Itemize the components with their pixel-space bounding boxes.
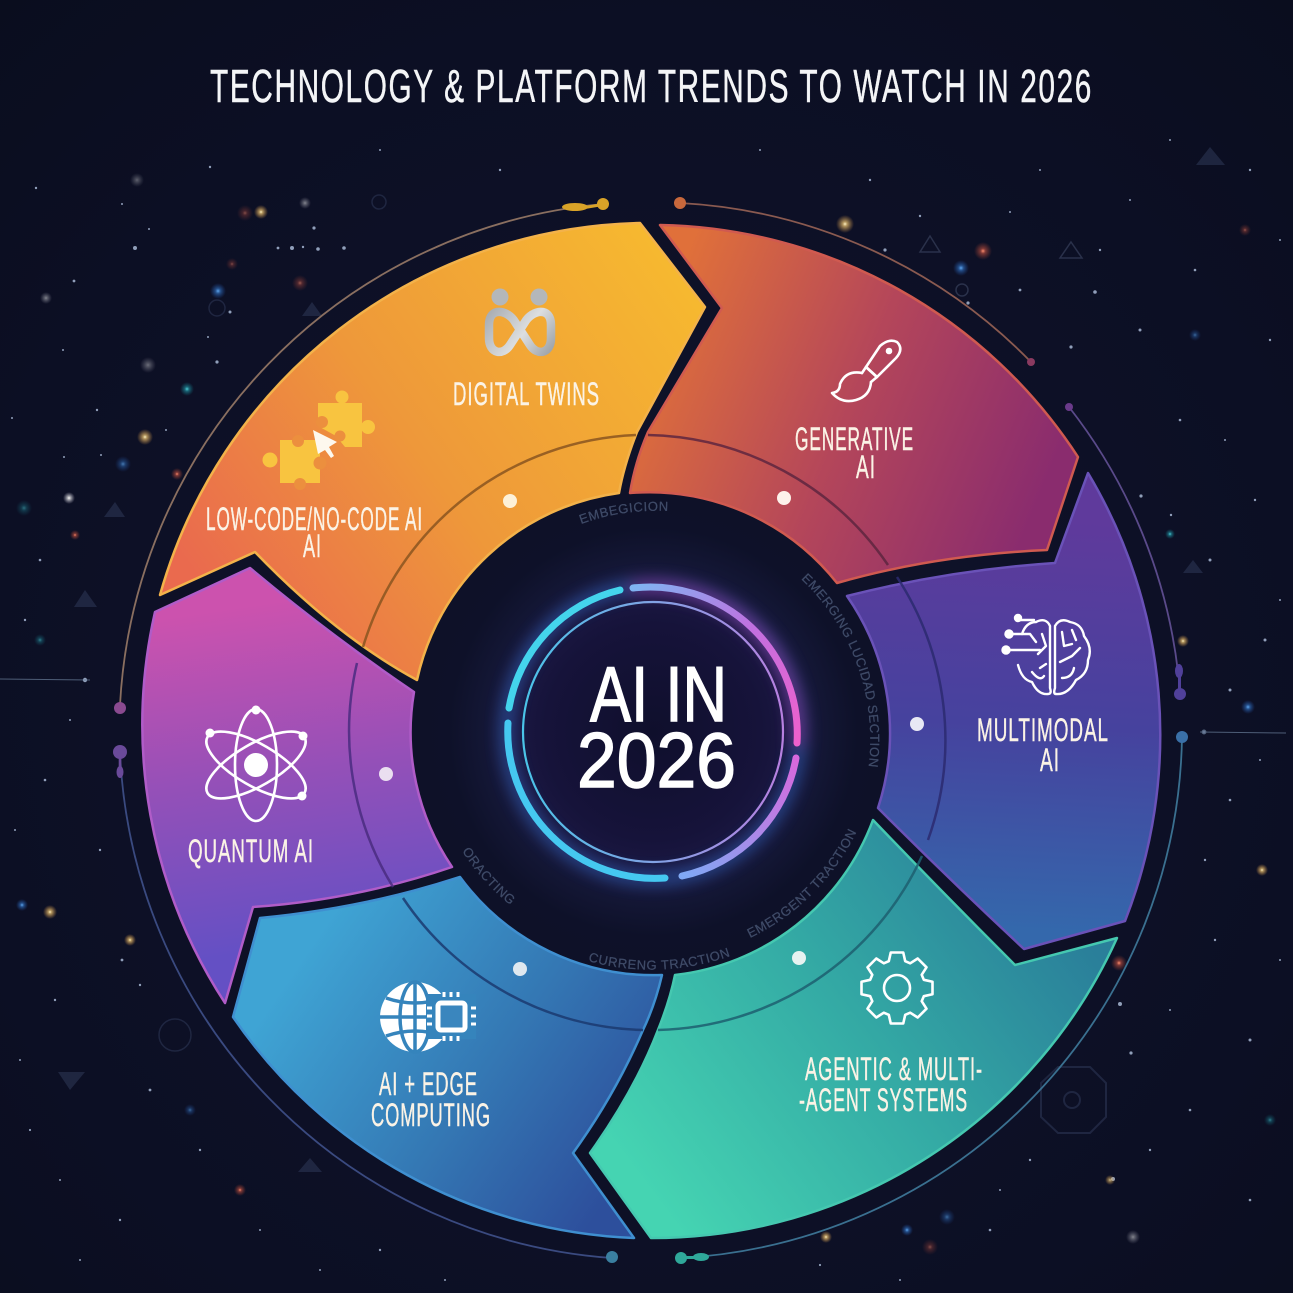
center hub disc: [405, 488, 895, 978]
dot: [503, 494, 517, 508]
label: AI + edge: AI + EDGE: [379, 1066, 478, 1102]
icon: gear: [862, 952, 932, 1024]
curved ghost labels: EMERGENT TRACTION: [746, 828, 856, 938]
label: multimodal AI line: AI: [1040, 742, 1060, 778]
curved ghost labels: CURRENG TRACTION: [590, 948, 730, 970]
label: generative: GENERATIVE: [795, 421, 914, 457]
dot: [910, 717, 924, 731]
side connector lines: [0, 679, 1286, 734]
curved ghost labels: ORACTING: [464, 848, 514, 904]
ring: violet: [349, 663, 393, 887]
center title: 2026: [577, 716, 736, 804]
icon: digital twins: [489, 288, 551, 352]
segment: generative AI: [630, 225, 1078, 583]
label: multimodal: MULTIMODAL: [977, 712, 1109, 748]
segment: agentic systems: [590, 820, 1117, 1238]
ring: red: [648, 435, 888, 565]
label: quantum AI: QUANTUM AI: [188, 833, 314, 869]
label: computing: COMPUTING: [371, 1097, 491, 1133]
label: low-code no-code: LOW-CODE/NO-CODE AI: [206, 501, 423, 537]
dot: [379, 767, 393, 781]
central glow: [506, 585, 800, 879]
icon: puzzle pieces with cursor: [262, 390, 375, 490]
dot: [792, 951, 806, 965]
label: agentic line 2: -AGENT SYSTEMS: [799, 1082, 968, 1118]
dot: [513, 962, 527, 976]
outer orbit arcs: [113, 197, 1188, 1264]
faint background shapes: [58, 147, 1225, 1172]
ring: orange: [363, 435, 636, 647]
icon: atom: [197, 706, 315, 821]
icon: paintbrush: [832, 341, 900, 401]
icon: brain: [1002, 615, 1090, 694]
segment: multimodal AI: [847, 473, 1160, 949]
segment: quantum AI: [142, 568, 452, 1003]
ring: teal: [658, 856, 922, 1030]
center title: [577, 650, 736, 804]
icon: globe with chip: [380, 982, 476, 1052]
segment: AI and edge computing: [233, 877, 662, 1238]
ring: purple: [897, 577, 945, 840]
segment: digital twins and low-code: [160, 223, 705, 680]
curved ghost labels: [464, 502, 880, 970]
label: generative AI line: AI: [856, 449, 876, 485]
label: agentic line 1: AGENTIC & MULTI-: [805, 1051, 983, 1087]
curved ghost labels: EMERGING LUCIDAD SECTION: [802, 573, 880, 767]
orbit nodes: [113, 197, 1188, 1264]
ring: blue: [403, 898, 643, 1030]
center title: AI IN: [590, 650, 727, 738]
dot: [777, 491, 791, 505]
curved ghost labels: EMBEGICION: [579, 502, 668, 524]
label: digital twins: DIGITAL TWINS: [453, 376, 600, 412]
inner ring: [523, 602, 783, 862]
central ring gauge: [508, 587, 797, 878]
label: low-code AI line: AI: [303, 528, 322, 564]
